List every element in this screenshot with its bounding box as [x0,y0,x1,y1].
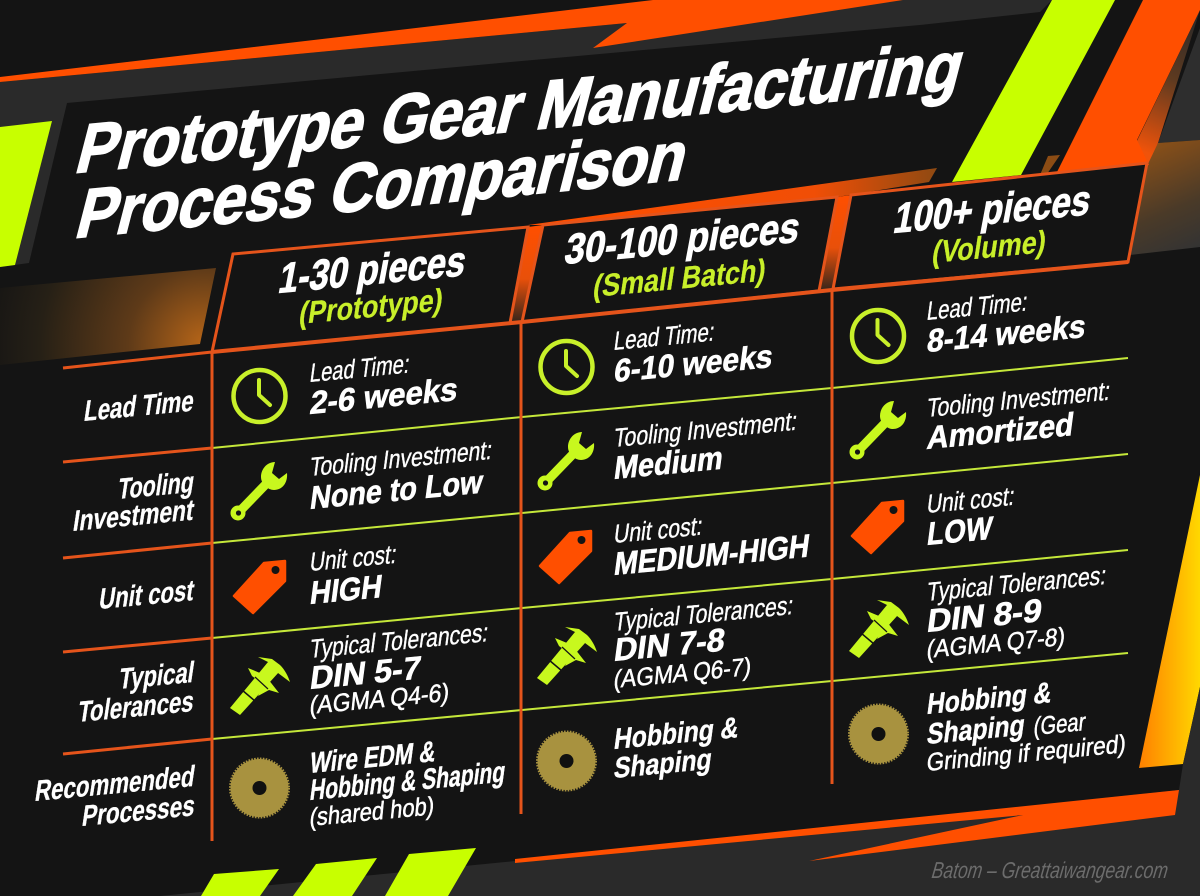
icon: gear [230,758,289,818]
bottom gray band [160,687,1200,896]
unit cost cell: Unit cost: [308,539,399,577]
icon: caliper [537,627,597,685]
brown fleck [1040,155,1060,175]
icon: wrench [850,401,906,460]
bottom lime bars [201,848,476,896]
lead time cell [852,286,1088,362]
tooling cell: Tooling Investment: [308,435,494,482]
column header frames [212,163,1147,352]
tooling cell [538,406,799,490]
header: 1-30 pieces: 1-30 pieces [275,237,470,303]
icon: price tag [852,501,903,553]
column 1: Prototype [230,348,508,832]
row label: Recommended Processes: Processes [80,789,197,833]
top right brown gradient shape [1130,140,1200,255]
tolerances cell: Typical Tolerances: [612,590,795,637]
icon: clock [852,310,904,362]
processes cell: Hobbing & [925,676,1054,721]
title [69,26,974,253]
tolerances cell [537,590,795,694]
lead time cell [234,348,460,422]
top gray band [0,0,1052,267]
icon: gear [537,732,596,790]
row label: Recommended Processes: Recommended [33,760,197,808]
row label: Tooling Investment: Investment [71,494,197,538]
unit cost cell [234,539,399,613]
tolerances cell: Typical Tolerances: [308,617,490,664]
header: 1-30 pieces: (Prototype) [297,282,446,331]
tolerances cell: DIN 8-9 [925,592,1044,639]
icon: caliper [230,657,290,715]
unit cost cell: MEDIUM-HIGH [612,527,812,582]
tooling cell: Tooling Investment: [612,406,799,453]
orange diagonal stripe [1055,0,1200,176]
icon: wrench [538,432,594,490]
top right gray shape [1158,28,1200,143]
header: 30-100 pieces: (Small Batch) [591,253,768,304]
column 3: Volume [849,286,1127,777]
tooling cell [850,376,1112,460]
unit cost cell: LOW [925,510,995,552]
table grid lines [63,290,1128,841]
row label: Tooling Investment: Tooling [116,466,197,506]
lime diagonal stripe [952,0,1115,182]
header: 30-100 pieces [561,204,804,304]
lead time cell: 8-14 weeks [925,308,1088,359]
lead time cell: Lead Time: [612,316,717,356]
lead time cell: Lead Time: [308,348,412,388]
header: 30-100 pieces: 30-100 pieces [561,204,804,274]
unit cost cell: HIGH [308,568,385,611]
header: 100+ pieces: (Volume) [930,224,1049,270]
lime side block [0,121,52,267]
processes cell: Wire EDM & [308,735,438,780]
processes cell: Hobbing & [612,711,741,756]
lead time cell [540,316,775,393]
row label: Typical Tolerances: Typical [117,656,197,696]
icon: caliper [849,600,909,658]
icon: wrench [230,462,287,520]
tooling cell: None to Low [308,464,486,516]
title: Process Comparison [69,116,698,253]
row label: Typical Tolerances: Tolerances [76,685,196,729]
column 2: Small Batch [537,316,812,790]
orange wedge above second column [528,168,937,225]
tooling cell: Medium [612,440,725,486]
tolerances cell [230,617,490,720]
processes cell [230,735,508,832]
yellow side stripe [1139,475,1200,768]
processes cell: (shared hob) [308,792,436,832]
unit cost cell [540,511,812,583]
tooling cell [230,435,494,520]
title: Prototype Gear Manufacturing [69,26,974,188]
tolerances cell: (AGMA Q7-8) [925,623,1067,664]
row label: Lead Time: Lead Time [82,385,196,428]
unit cost cell [852,481,1017,553]
header: 100+ pieces: 100+ pieces [890,176,1095,243]
orange diagonal stripe glow [1135,10,1200,166]
tolerances cell: (AGMA Q6-7) [612,653,753,694]
tolerances cell: (AGMA Q4-6) [308,679,451,720]
icon: gear [849,704,908,764]
bottom orange streak [515,790,1179,863]
tolerances cell [849,560,1108,664]
lead time cell: 6-10 weeks [612,338,775,389]
icon: price tag [540,531,591,583]
tooling cell: Amortized [925,406,1076,456]
tooling cell: Tooling Investment: [925,376,1112,423]
left gradient block [0,268,216,365]
row label: Recommended Processes [33,760,197,833]
processes cell: Shaping [925,709,1027,751]
header: 100+ pieces [890,176,1095,270]
processes cell: Shaping [612,743,714,785]
unit cost cell: Unit cost: [925,481,1017,519]
icon: clock [234,370,286,422]
icon: clock [540,341,592,393]
lead time cell: 2-6 weeks [308,371,460,421]
processes cell: Grinding if required) [925,730,1127,777]
icon: price tag [234,561,285,613]
tolerances cell: DIN 7-8 [612,621,727,668]
processes cell [849,676,1127,777]
unit cost cell: Unit cost: [612,511,705,549]
processes cell: (Gear [1032,708,1087,741]
tolerances cell: DIN 5-7 [308,649,423,696]
processes cell [537,711,741,790]
row label: Tooling Investment [71,466,197,538]
row label: Typical Tolerances [76,656,197,729]
row label: Unit cost: Unit cost [97,574,197,616]
tolerances cell: Typical Tolerances: [925,560,1108,607]
lead time cell: Lead Time: [925,286,1030,326]
top orange streak [0,0,903,82]
header: 1-30 pieces [275,237,470,331]
processes cell: Hobbing & Shaping [308,755,508,807]
